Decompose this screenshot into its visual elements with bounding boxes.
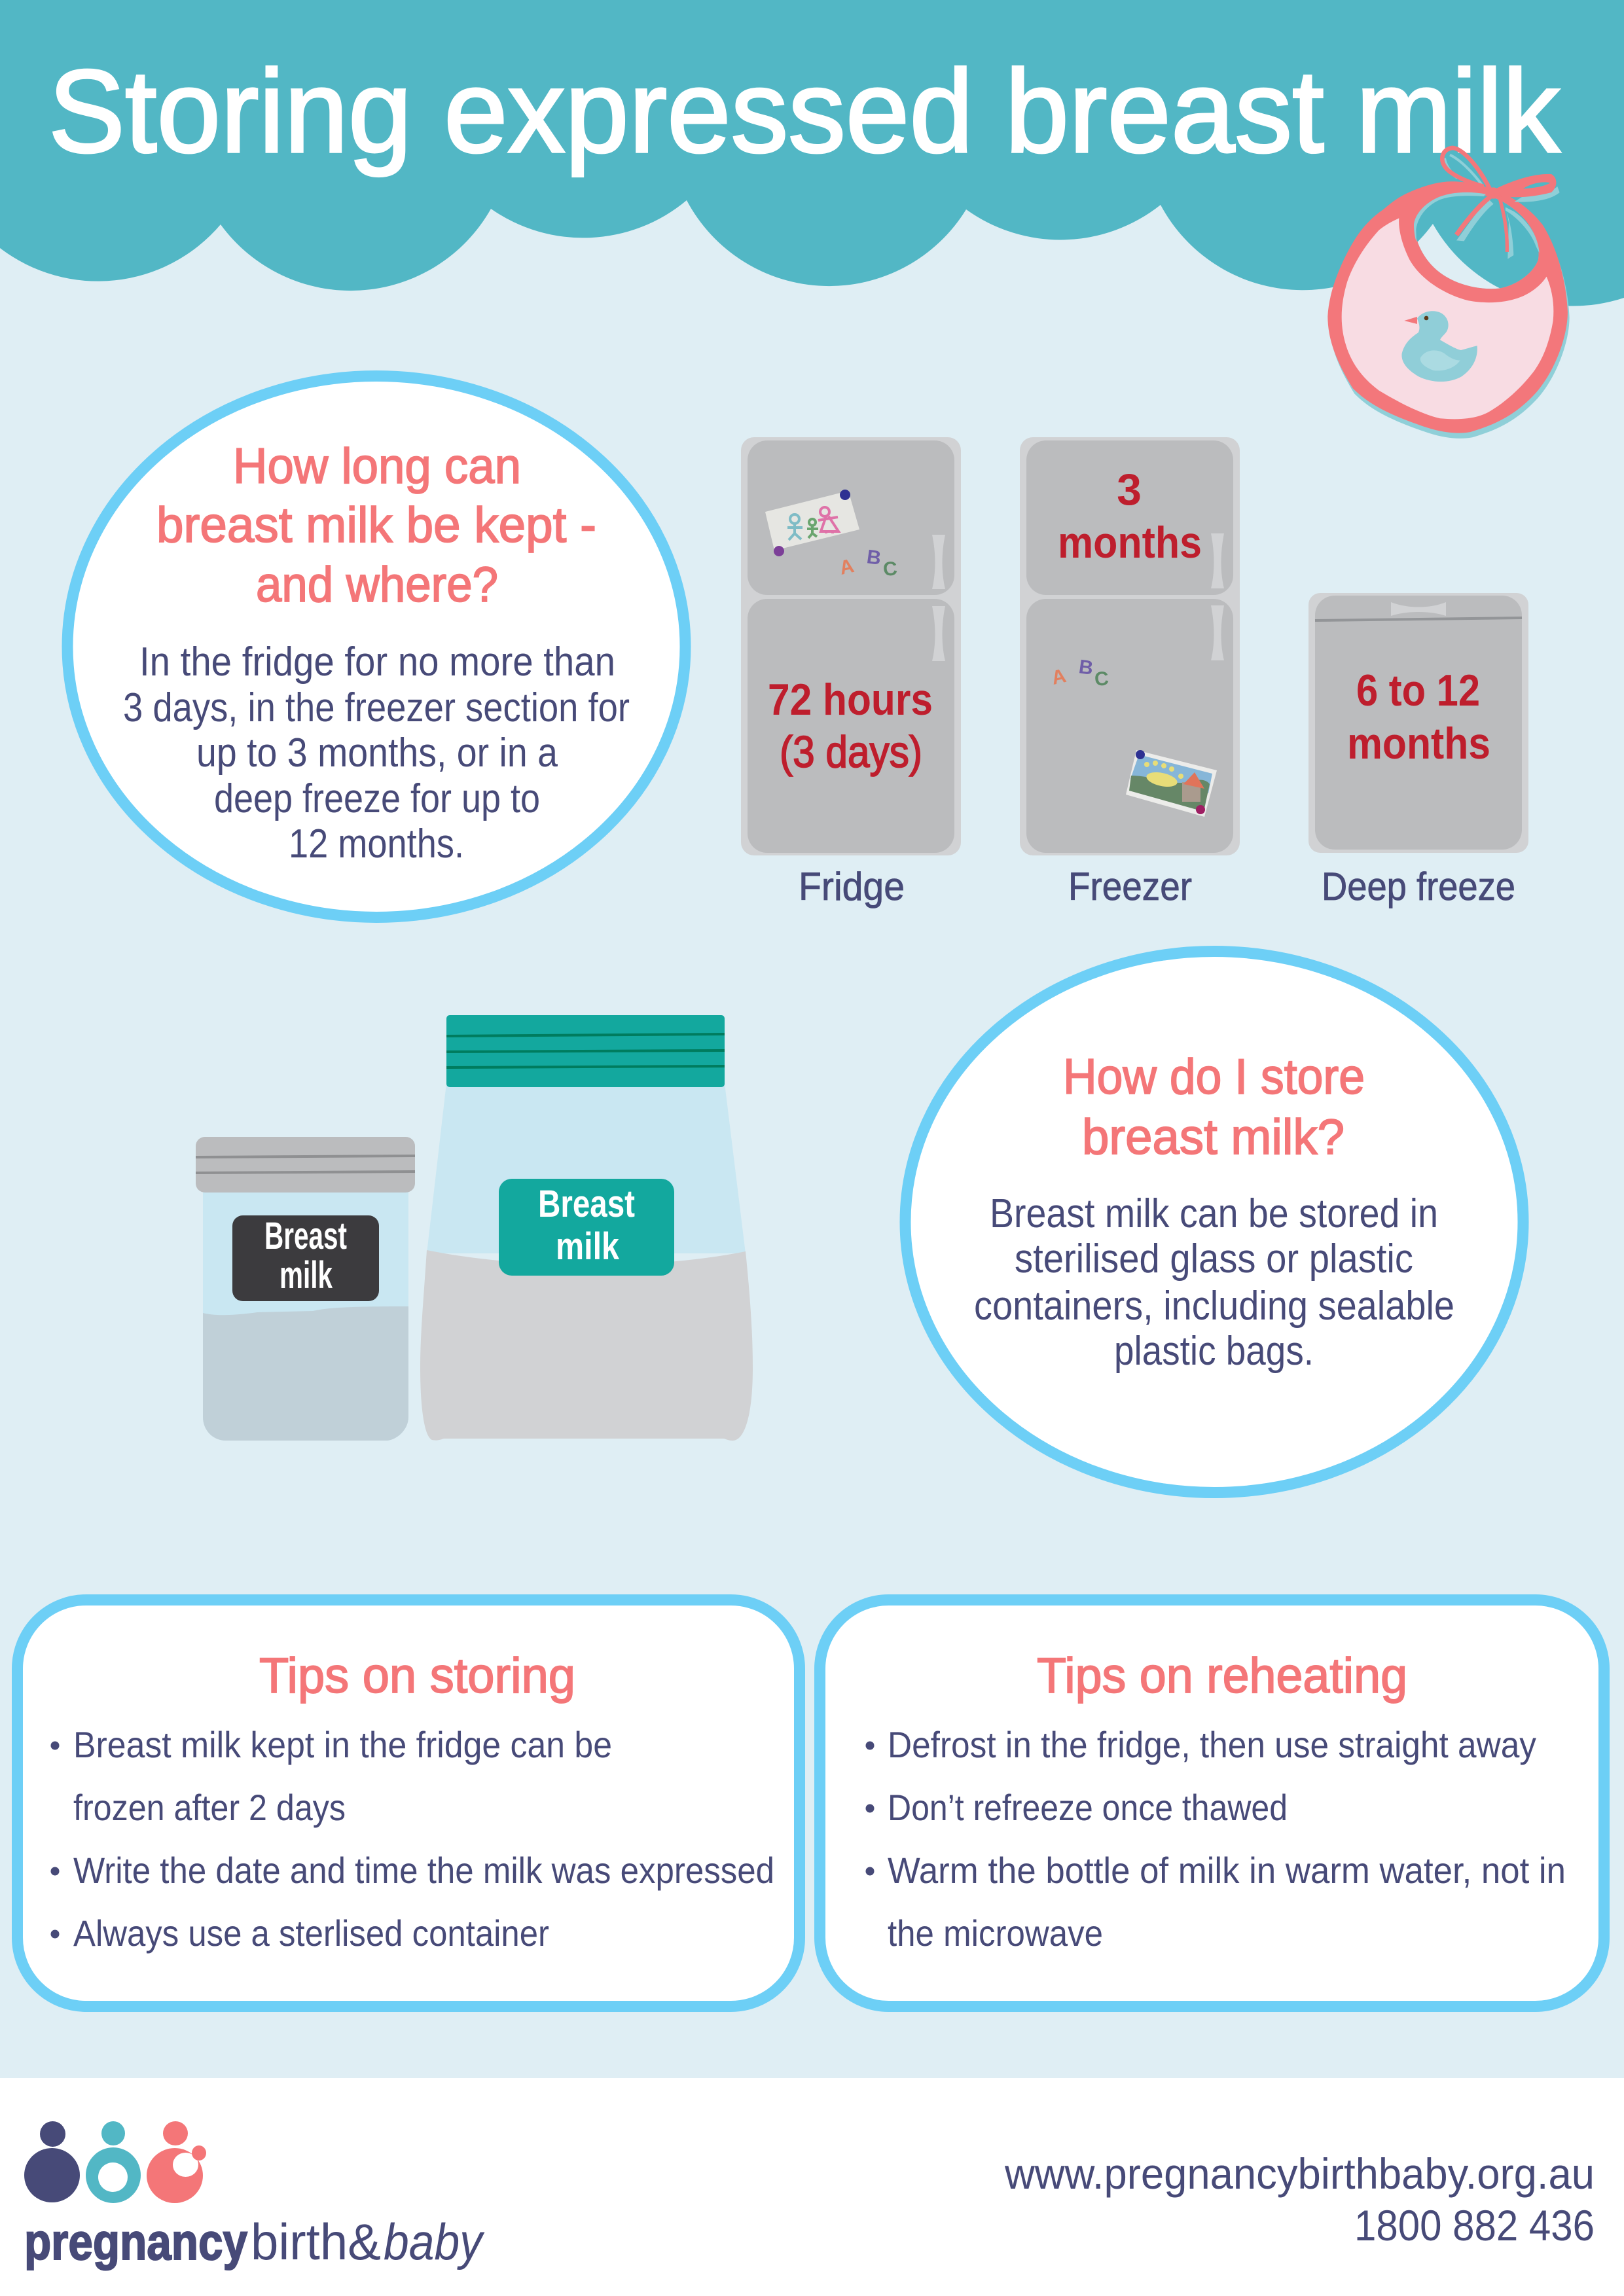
logo wordmark: baby [384, 2213, 485, 2270]
label: 6 to 12 months [1347, 666, 1490, 768]
heading: how do I store: breast milk? [1082, 1109, 1344, 1165]
label: 3 months [1058, 465, 1202, 567]
text block: store body: plastic bags. [1114, 1329, 1314, 1374]
illustration: small jar [196, 1137, 415, 1441]
text block: store body: sterilised glass or plastic [1015, 1236, 1413, 1282]
label: small jar: Breast [264, 1215, 347, 1257]
list: storing tips: Always use a sterlised container [73, 1912, 549, 1954]
panel: tips on storing [17, 1600, 800, 2007]
list: storing tips: Write the date and time the milk was expressed [73, 1850, 774, 1891]
icon: ABC magnets: B [1077, 656, 1094, 679]
caption: freezer: Freezer [1068, 865, 1192, 908]
text block: store body [974, 1191, 1454, 1374]
label: 6 to 12 months: months [1347, 719, 1490, 768]
list: storing tips [51, 1724, 774, 1954]
list: storing tips: frozen after 2 days [73, 1787, 346, 1828]
list: reheating tips: Warm the bottle of milk in warm water, not in [888, 1850, 1566, 1891]
icon: ABC magnets: A [1050, 665, 1068, 689]
title: Storing expressed breast milk [48, 46, 1561, 177]
panel: how long circle [67, 376, 685, 918]
list: storing tips: Breast milk kept in the fridge can be [73, 1724, 612, 1765]
label: small jar: milk [280, 1254, 333, 1297]
heading: tips on reheating: Tips on reheating [1037, 1648, 1407, 1704]
header scalloped banner [0, 0, 1624, 306]
list: reheating tips: Defrost in the fridge, then use straight away [888, 1724, 1536, 1765]
label: large bag: Breast [538, 1183, 635, 1225]
heading: how do I store [1063, 1049, 1365, 1165]
text block: how long body: 3 days, in the freezer section for [123, 685, 630, 730]
text block: store body: Breast milk can be stored in [990, 1191, 1438, 1236]
heading: how do I store: How do I store [1063, 1049, 1365, 1105]
label: 3 months: months [1058, 518, 1202, 567]
label: 72 hours: (3 days) [780, 727, 922, 777]
text block: how long body [123, 639, 630, 867]
label: large bag [499, 1179, 674, 1276]
label: 72 hours [768, 675, 933, 777]
footer [0, 2078, 1624, 2296]
icon: ABC magnets [1050, 656, 1110, 691]
icon: landscape picture magnet [1126, 750, 1217, 817]
label: large bag: milk [556, 1225, 620, 1268]
panel: deep freeze [1308, 593, 1528, 908]
logo icon: three figures [24, 2121, 206, 2203]
heading: how long: How long can [233, 439, 521, 494]
text block: store body: containers, including sealable [974, 1283, 1454, 1329]
list: reheating tips [865, 1724, 1566, 1954]
icon: ABC magnets: C [882, 558, 898, 581]
panel: how to store circle [905, 952, 1523, 1492]
logo wordmark: birth& [251, 2213, 381, 2270]
contact details: www.pregnancybirthbaby.org.au [1004, 2149, 1595, 2198]
contact details: 1800 882 436 [1354, 2201, 1595, 2250]
heading: how long [156, 439, 596, 613]
caption: deep freeze: Deep freeze [1322, 865, 1515, 908]
list: reheating tips: the microwave [888, 1912, 1103, 1954]
icon: baby bib with duck [1327, 148, 1570, 439]
label: 72 hours: 72 hours [768, 675, 933, 725]
text block: how long body: In the fridge for no more than [139, 639, 615, 685]
panel: tips on reheating [820, 1600, 1604, 2007]
logo wordmark: pregnancy [24, 2213, 247, 2270]
heading: how long: breast milk be kept - [156, 497, 596, 553]
illustration: large storage bag [420, 1015, 753, 1441]
icon: ABC magnets: B [865, 546, 882, 569]
contact details [1004, 2149, 1595, 2250]
text block: how long body: up to 3 months, or in a [196, 730, 558, 776]
panel: fridge [741, 437, 961, 908]
icon: ABC magnets: C [1094, 668, 1110, 691]
heading: how long: and where? [256, 557, 498, 613]
heading: tips on storing: Tips on storing [259, 1648, 575, 1704]
icon: ABC magnets [838, 546, 898, 581]
text block: how long body: 12 months. [289, 821, 464, 867]
caption: fridge: Fridge [799, 865, 905, 908]
list: reheating tips: Don’t refreeze once thawed [888, 1787, 1288, 1828]
text block: how long body: deep freeze for up to [214, 776, 540, 821]
label: small jar [232, 1215, 379, 1301]
label: 6 to 12 months: 6 to 12 [1356, 666, 1480, 715]
label: 3 months: 3 [1117, 465, 1142, 514]
logo wordmark [24, 2213, 485, 2270]
panel: freezer [1020, 437, 1240, 908]
icon: child's drawing magnet [765, 490, 859, 556]
icon: ABC magnets: A [838, 555, 856, 579]
